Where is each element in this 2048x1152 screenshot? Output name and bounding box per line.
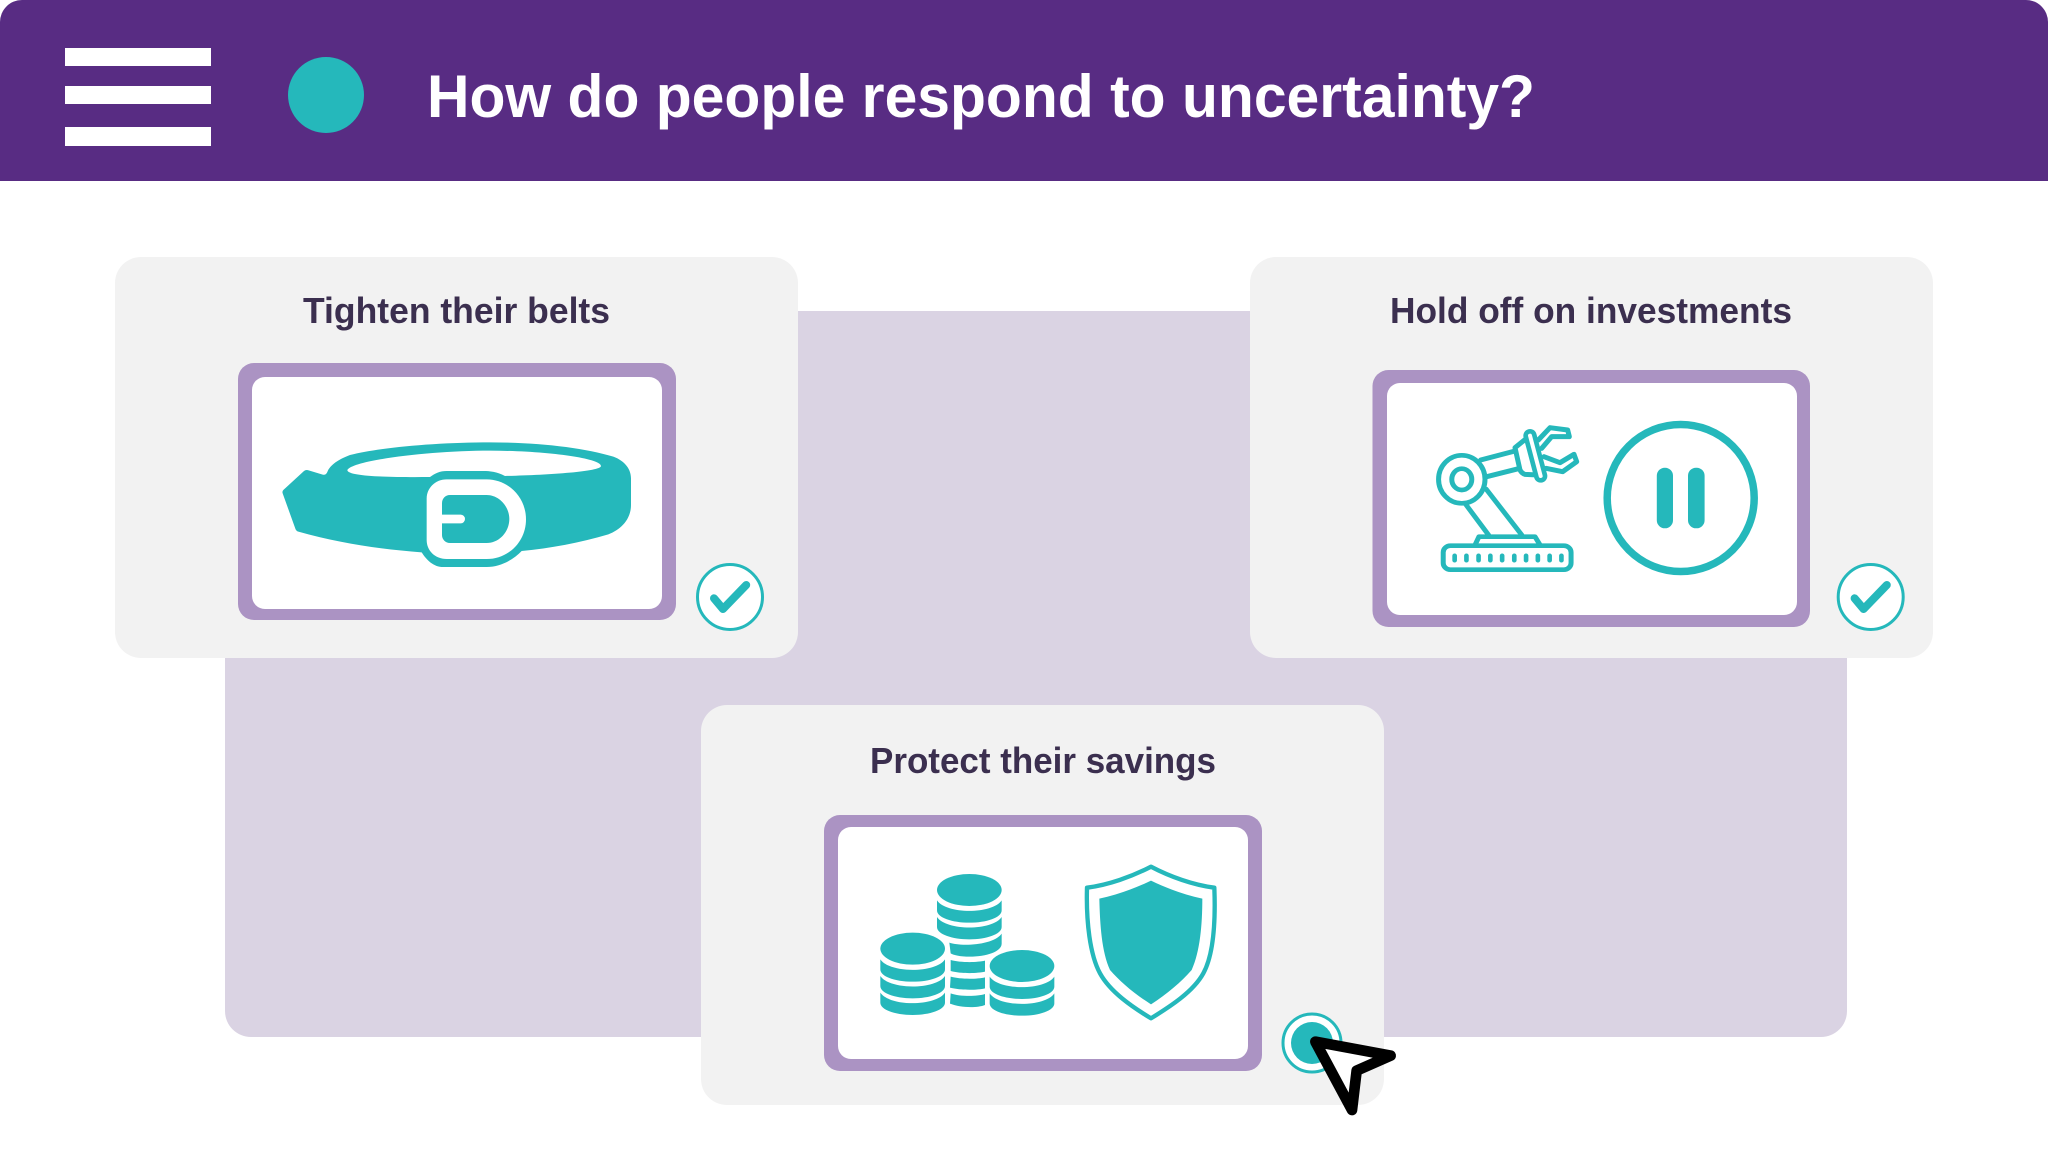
image frame: robot and pause [1372,370,1810,627]
panel: hold off on investments [1250,257,1933,658]
icon: check mark [1838,564,1903,630]
icon: selected radio button [1283,1014,1341,1072]
icon: robot arm [1439,428,1577,570]
heading: hold off on investments: Hold off on investments [1390,290,1792,331]
panel: tighten their belts [115,257,798,658]
icon: mouse cursor [1315,1042,1391,1110]
icon: hamburger menu [65,48,211,146]
icon: belt [282,442,631,567]
header bar [0,0,2048,181]
background panel [225,311,1847,1037]
image frame: belt [238,363,676,620]
icon: coin stacks [880,874,1054,1016]
icon: pause button [1607,424,1754,572]
icon: header teal dot [288,57,364,133]
title: How do people respond to uncertainty? [427,63,1535,130]
heading: protect their savings: Protect their savings [870,740,1216,781]
icon: check mark [698,564,762,630]
icon: shield [1087,867,1215,1018]
panel: protect their savings [701,705,1384,1105]
heading: tighten their belts: Tighten their belts [303,290,610,331]
image frame: coins and shield [824,815,1262,1071]
